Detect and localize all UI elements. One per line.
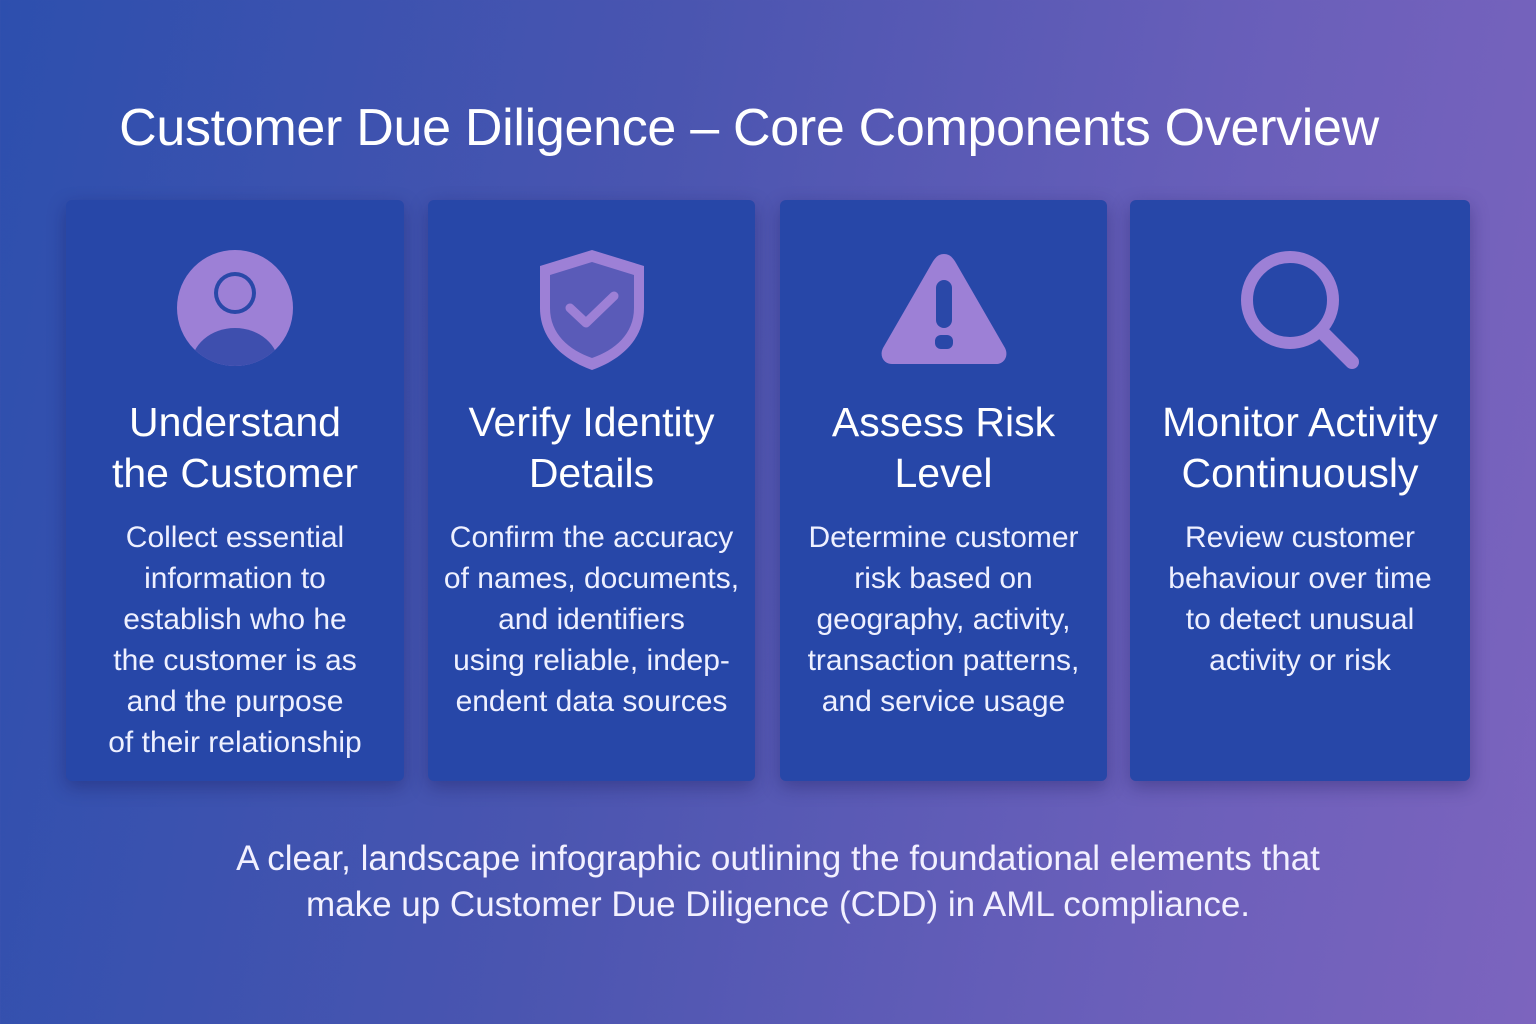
heading [1162, 399, 1438, 496]
text: using reliable, indep- [453, 644, 730, 677]
footer caption: make up Customer Due Diligence (CDD) in AML compliance. [306, 885, 1250, 924]
text: the customer is as [113, 644, 357, 677]
text: risk based on [854, 562, 1033, 595]
text [1168, 521, 1432, 677]
text: establish who he [123, 603, 347, 636]
heading: the Customer [112, 450, 358, 496]
text: Confirm the accuracy [450, 521, 733, 554]
heading: Assess Risk [832, 399, 1055, 445]
text: endent data sources [456, 685, 727, 718]
text: to detect unusual [1186, 603, 1414, 636]
text: behaviour over time [1168, 562, 1432, 595]
text [108, 521, 362, 759]
heading: Monitor Activity [1162, 399, 1438, 445]
text: and service usage [822, 685, 1065, 718]
heading [112, 399, 358, 496]
heading [468, 399, 715, 496]
text: of names, documents, [444, 562, 739, 595]
icon: shield [540, 250, 644, 370]
footer caption [236, 839, 1320, 924]
icon: warning [882, 254, 1006, 364]
heading: Level [894, 450, 992, 496]
text: Collect essential [126, 521, 344, 554]
heading: Continuously [1181, 450, 1419, 496]
text: and the purpose [127, 685, 343, 718]
text: information to [144, 562, 326, 595]
heading [832, 399, 1056, 496]
text: geography, activity, [816, 603, 1071, 636]
heading: Verify Identity [468, 399, 715, 445]
icon: magnifier [1241, 251, 1359, 369]
text: Review customer [1185, 521, 1415, 554]
panel: understand the customer [66, 200, 404, 781]
text: activity or risk [1209, 644, 1391, 677]
text: of their relationship [108, 726, 362, 759]
text: transaction patterns, [808, 644, 1079, 677]
title: Customer Due Diligence – Core Components Overview [119, 99, 1379, 157]
icon: person [177, 250, 293, 366]
panel: monitor activity [1130, 200, 1470, 781]
footer caption: A clear, landscape infographic outlining the foundational elements that [236, 839, 1320, 878]
heading: Understand [129, 399, 341, 445]
text [444, 521, 739, 718]
text: Determine customer [808, 521, 1079, 554]
heading: Details [529, 450, 654, 496]
text [808, 521, 1079, 718]
panel: verify identity [428, 200, 755, 781]
panel: assess risk [780, 200, 1107, 781]
text: and identifiers [498, 603, 685, 636]
